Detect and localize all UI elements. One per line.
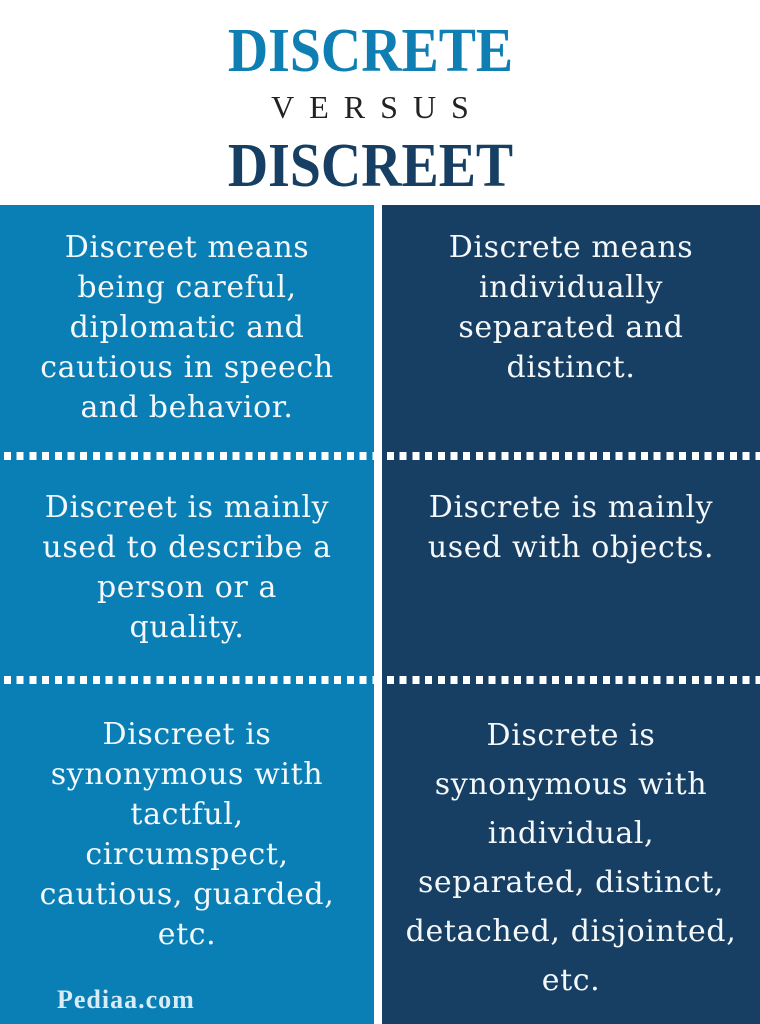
text: discreet synonyms	[40, 717, 334, 952]
text: discrete meaning: separated and	[458, 310, 684, 345]
title: discreet: DISCREET	[227, 132, 513, 200]
text: discreet usage	[42, 490, 332, 645]
text: discrete synonyms: synonymous with	[435, 767, 707, 802]
text: discrete synonyms: individual,	[488, 816, 654, 851]
text: discreet meaning: and behavior.	[80, 390, 294, 425]
text: discrete synonyms: etc.	[542, 963, 600, 998]
text: discreet meaning: being careful,	[77, 270, 297, 305]
text: discreet synonyms: cautious, guarded,	[40, 877, 334, 912]
text: discrete synonyms	[406, 718, 736, 998]
text: discreet meaning: Discreet means	[65, 230, 309, 265]
logo: pediaa.com: Pediaa.com	[57, 985, 195, 1014]
text: discrete meaning: distinct.	[507, 350, 635, 385]
title	[227, 17, 513, 200]
title: discrete: DISCRETE	[227, 17, 513, 85]
text: discrete usage: used with objects.	[428, 530, 714, 565]
text: discreet usage: person or a	[97, 570, 277, 605]
panel: discrete (right)	[382, 205, 760, 1024]
text: discreet meaning	[40, 230, 334, 425]
title: versus: VERSUS	[271, 89, 484, 125]
text: discreet synonyms: circumspect,	[85, 837, 289, 872]
text: discreet usage: quality.	[130, 610, 244, 645]
text: discreet synonyms: tactful,	[130, 797, 244, 832]
text: discrete synonyms: separated, distinct,	[418, 865, 724, 900]
text: discreet usage: used to describe a	[42, 530, 332, 565]
text: discrete meaning: individually	[479, 270, 663, 305]
text: discrete synonyms: detached, disjointed,	[406, 914, 736, 949]
text: discrete meaning: Discrete means	[449, 230, 693, 265]
text: discreet usage: Discreet is mainly	[45, 490, 329, 525]
panel: discreet (left)	[0, 205, 374, 1024]
text: discreet meaning: diplomatic and	[70, 310, 304, 345]
text: discrete usage	[428, 490, 714, 565]
text: discreet synonyms: synonymous with	[51, 757, 323, 792]
text: discreet synonyms: etc.	[158, 917, 216, 952]
text: discreet synonyms: Discreet is	[103, 717, 271, 752]
text: discrete usage: Discrete is mainly	[429, 490, 713, 525]
text: discrete synonyms: Discrete is	[487, 718, 655, 753]
text: discrete meaning	[449, 230, 693, 385]
text: discreet meaning: cautious in speech	[40, 350, 334, 385]
